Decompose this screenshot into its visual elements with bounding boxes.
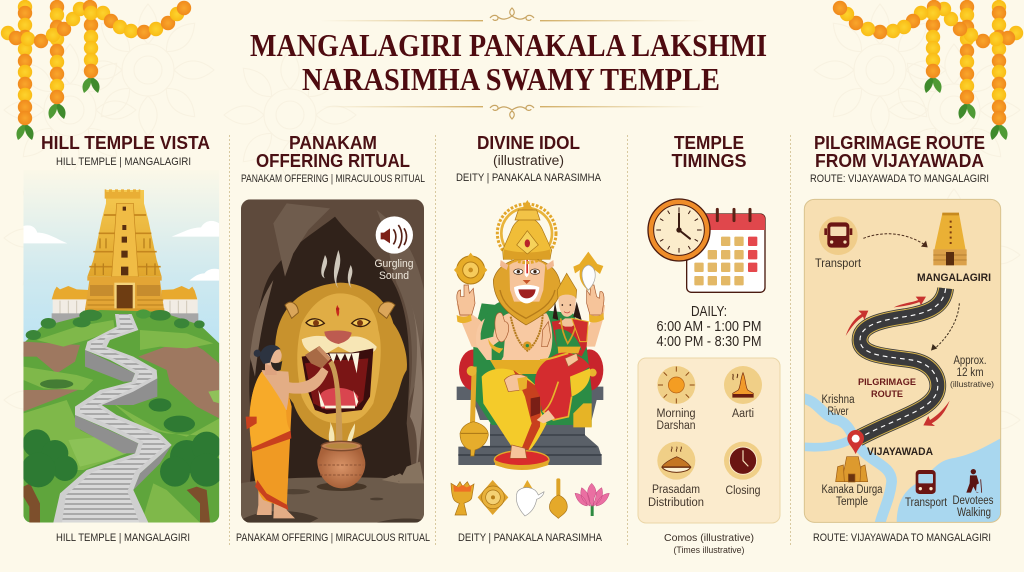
- label: pilgrimage route: PILGRIMAGE: [858, 377, 916, 388]
- panel: divine idol: [451, 133, 609, 544]
- illustration: hill temple and stairway: [21, 170, 223, 523]
- label: vijayawada: VIJAYAWADA: [867, 446, 933, 458]
- icon: morning darshan sun: [657, 366, 695, 404]
- panel: hill temple vista: [21, 133, 223, 544]
- icon: mangalagiri temple: [933, 213, 967, 265]
- icon: lamp: [451, 482, 474, 515]
- panel: temple timings: [638, 133, 780, 555]
- icon: lotus: [575, 483, 609, 516]
- map: route from vijayawada to mangalagiri: [802, 199, 1001, 523]
- caption: panakam: PANAKAM OFFERING | MIRACULOUS RITUAL: [236, 532, 430, 544]
- title ornament: top: [320, 8, 705, 21]
- label: distance: Approx.: [954, 355, 986, 367]
- arrows: route direction: [846, 297, 950, 426]
- label: devotees walking: Devotees: [952, 495, 994, 507]
- label: morning darshan: Morning: [656, 408, 696, 420]
- label: krishna river: River: [828, 406, 849, 418]
- heading: temple timings: TEMPLE: [674, 133, 744, 153]
- label: kanaka durga temple: Temple: [836, 496, 868, 508]
- illustration: narasimha and lakshmi idol: [454, 200, 605, 469]
- label: morning darshan: [656, 408, 696, 432]
- text: daily timings: DAILY:: [691, 304, 727, 320]
- subheading: route: ROUTE: VIJAYAWADA TO MANGALAGIRI: [810, 173, 989, 185]
- arrow: dashed route: [931, 303, 959, 351]
- label: prasadam distribution: Distribution: [648, 497, 704, 509]
- label: gurgling sound: Sound: [379, 270, 409, 282]
- heading: divine idol: DIVINE IDOL: [477, 133, 580, 153]
- text: daily timings: [656, 304, 762, 350]
- panel: pilgrimage route: [802, 133, 1001, 544]
- label: prasadam distribution: [648, 484, 704, 509]
- caption: route: ROUTE: VIJAYAWADA TO MANGALAGIRI: [813, 532, 991, 544]
- heading: panakam offering ritual: [256, 133, 410, 171]
- text: daily timings: 4:00 PM - 8:30 PM: [656, 334, 762, 350]
- panel: panakam offering ritual: [236, 133, 430, 544]
- label: kanaka durga temple: Kanaka Durga: [822, 484, 883, 496]
- icon: aarti bell: [724, 366, 762, 404]
- label: gurgling sound: [374, 258, 414, 282]
- note: illustrative times: [664, 532, 754, 555]
- panel: daily events: [638, 358, 780, 523]
- icon: devotee walking: [966, 469, 982, 493]
- icon: prasadam dish: [657, 442, 695, 480]
- label: morning darshan: Darshan: [656, 420, 696, 432]
- title: [250, 28, 767, 97]
- heading: hill temple vista: HILL TEMPLE VISTA: [41, 133, 210, 153]
- note: illustrative times: (Times illustrative): [674, 545, 744, 555]
- icon: bus top: [819, 216, 858, 255]
- heading: panakam offering ritual: PANAKAM: [289, 133, 377, 153]
- text: daily timings: 6:00 AM - 1:00 PM: [656, 319, 762, 335]
- label: aarti: Aarti: [732, 408, 754, 420]
- label: distance: [950, 355, 994, 389]
- note: illustrative times: Comos (illustrative): [664, 532, 754, 544]
- icon: closing clock: [724, 442, 762, 480]
- garland: top right: [833, 0, 1023, 140]
- title: MANGALAGIRI PANAKALA LAKSHMI: [250, 28, 767, 63]
- icon: bus bottom: [916, 470, 936, 494]
- subheading: hill temple: HILL TEMPLE | MANGALAGIRI: [56, 156, 191, 168]
- garland: top left: [1, 0, 191, 140]
- title ornament: bottom: [320, 105, 705, 119]
- label: krishna river: Krishna: [822, 394, 855, 406]
- icon: kanaka durga temple: [836, 457, 868, 482]
- label: kanaka durga temple: [822, 484, 883, 508]
- heading: panakam offering ritual: OFFERING RITUAL: [256, 151, 410, 171]
- caption: deity: DEITY | PANAKALA NARASIMHA: [458, 532, 603, 544]
- label: devotees walking: Walking: [957, 507, 991, 519]
- road: winding route: [858, 288, 946, 438]
- heading: temple timings: [672, 133, 746, 171]
- label: devotees walking: [952, 495, 994, 519]
- label: transport top: Transport: [815, 258, 862, 270]
- icon row: sacred symbols: [451, 478, 609, 518]
- label: distance: 12 km: [956, 367, 984, 379]
- icon: clock and calendar: [648, 199, 765, 292]
- subheading: panakam: PANAKAM OFFERING | MIRACULOUS RITUAL: [241, 173, 425, 185]
- icon: conch: [516, 480, 544, 516]
- icon: chakra: [478, 480, 508, 515]
- illustration: priest pouring panakam into lion mouth: [241, 199, 424, 523]
- title: NARASIMHA SWAMY TEMPLE: [302, 62, 720, 97]
- note: illustrative: (illustrative): [493, 153, 564, 168]
- heading: temple timings: TIMINGS: [672, 151, 746, 171]
- label: prasadam distribution: Prasadam: [652, 484, 700, 496]
- caption: hill temple: HILL TEMPLE | MANGALAGIRI: [56, 532, 190, 544]
- label: pilgrimage route: [858, 377, 916, 400]
- heading: pilgrimage route: FROM VIJAYAWADA: [815, 151, 984, 171]
- label: mangalagiri: MANGALAGIRI: [917, 272, 991, 284]
- label: transport bottom: Transport: [905, 497, 948, 509]
- label: closing: Closing: [726, 485, 760, 497]
- heading: pilgrimage route: [814, 133, 985, 171]
- label: gurgling sound: Gurgling: [374, 258, 414, 270]
- subheading: deity: DEITY | PANAKALA NARASIMHA: [456, 172, 602, 184]
- icon: map pin: [847, 430, 864, 454]
- heading: pilgrimage route: PILGRIMAGE ROUTE: [814, 133, 985, 153]
- icon: mace: [549, 478, 567, 518]
- label: distance: (illustrative): [950, 379, 994, 389]
- label: pilgrimage route: ROUTE: [871, 389, 903, 400]
- arrow: transport to temple: [863, 234, 928, 247]
- label: krishna river: [822, 394, 855, 418]
